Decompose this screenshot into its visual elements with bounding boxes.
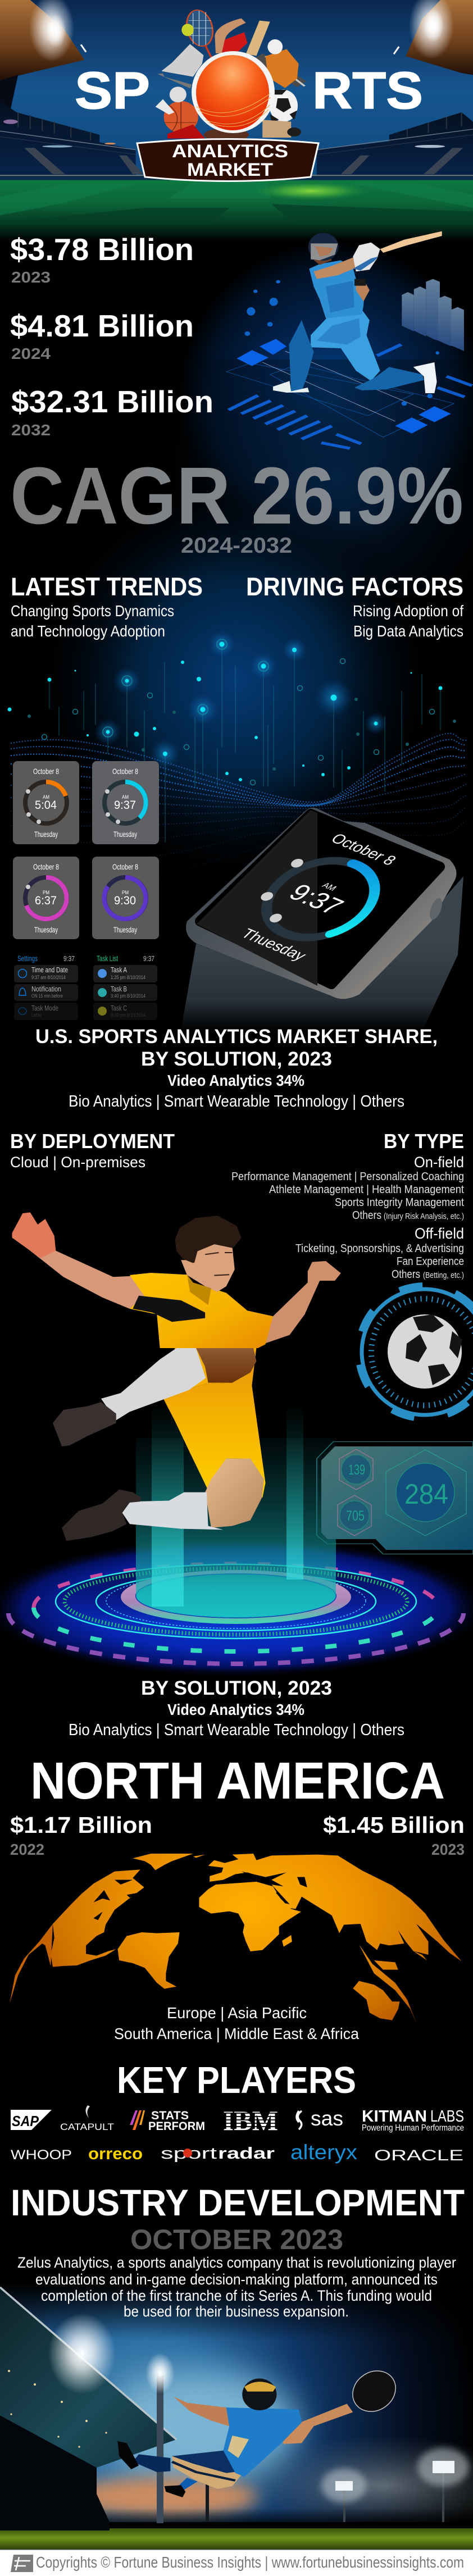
ball (345, 2363, 403, 2420)
logo: SAS: sas (311, 2107, 343, 2130)
logo: Oracle: ORACLE (374, 2147, 463, 2164)
settings list: Task Mode (31, 1004, 58, 1012)
upper body (12, 1212, 341, 1348)
text: deployment options: Cloud | On-premises (10, 1154, 145, 1171)
title word: SP: SP (75, 61, 150, 120)
legs (53, 1348, 266, 1541)
task list: Task C (111, 1004, 127, 1012)
card ring (104, 782, 146, 823)
list: off-field types: Others (392, 1268, 420, 1281)
roof floodlight (48, 2313, 116, 2394)
list: off-field types (295, 1225, 464, 1281)
settings list (14, 954, 78, 1020)
card time: AM (122, 794, 129, 800)
hud data panel (317, 1442, 473, 1554)
heading: latest trends: LATEST TRENDS (11, 572, 203, 601)
illustration: soccer player (12, 1212, 341, 1541)
text: trend description: Changing Sports Dynamics (11, 602, 174, 620)
logo: Sportradar (161, 2145, 275, 2163)
watch strap (181, 876, 463, 1031)
heading: by deployment: BY DEPLOYMENT (10, 1130, 175, 1153)
large gauge 284: 284 (404, 1478, 448, 1510)
text: other solutions: Bio Analytics | Smart Wearable Technology | Others (69, 1093, 404, 1110)
logo: Catapult: CATAPULT (60, 2122, 114, 2132)
heading: us market share: U.S. SPORTS ANALYTICS MARKET SHARE, (35, 1026, 438, 1048)
watch face: 9:37 (283, 879, 350, 920)
text: industry development paragraph: completion of the first tranche of its Series A. This funding would (41, 2287, 432, 2304)
text: trend description: and Technology Adoption (11, 622, 165, 640)
stat: 32.31 billion 2032 (11, 384, 213, 439)
settings list: Notification (31, 985, 61, 993)
watch face: October 8 (328, 831, 400, 868)
logo: SAP (11, 2110, 52, 2130)
fog (236, 2435, 473, 2536)
logo: Kitman Labs: LABS (430, 2108, 464, 2126)
title word: RTS: RTS (312, 61, 423, 120)
heading: by type: BY TYPE (384, 1130, 464, 1153)
settings list: ON 15 min before (31, 993, 63, 999)
hologram platform (0, 1537, 473, 1678)
large gauge 284 (386, 1450, 466, 1536)
stadium lights (29, 0, 454, 62)
map: orange globe (10, 1854, 462, 2023)
stadium stand (0, 2415, 110, 2531)
card day: Thuesday (34, 925, 58, 934)
task list: 9:00 pm 8/10/2014 (111, 1012, 145, 1018)
task list (93, 954, 157, 1020)
card time: AM (43, 794, 49, 800)
illustration: smart watch (181, 808, 463, 1031)
card date: October 8 (33, 767, 59, 776)
text: video analytics share: Video Analytics 34% (167, 1072, 304, 1089)
footer photo: stadium and footballer (0, 2283, 473, 2550)
banner: analytics market (137, 139, 319, 181)
card time: 5:04 (35, 799, 57, 812)
illustration: rising data lights (8, 631, 456, 843)
heading: us market share (35, 1026, 438, 1070)
watch card: cyan 9:37 (92, 761, 159, 844)
stat: 4.81 billion 2024 (10, 308, 194, 362)
card ring (104, 877, 146, 919)
text: video analytics share: Video Analytics 34% (167, 1701, 304, 1718)
task list: 3:40 pm 8/10/2014 (111, 993, 145, 999)
logo: Sportradar: radar (218, 2145, 275, 2163)
field (0, 180, 473, 240)
small gauge 705: 705 (346, 1508, 365, 1524)
watch card: orange 5:04 (13, 761, 79, 844)
platform glow (0, 1537, 473, 1678)
year 2023: 2023 (11, 268, 51, 286)
stat: 1.45 billion 2023: $1.45 Billion (323, 1812, 465, 1838)
ring markers (26, 789, 120, 889)
logo: Kitman Labs: KITMAN (362, 2108, 427, 2126)
header: stadium illustration (0, 0, 473, 240)
watch body (186, 808, 456, 999)
task list: 9:37 (143, 954, 154, 963)
card day: Thuesday (113, 830, 137, 839)
illustration: cricket batsman (273, 231, 442, 393)
card ring (25, 782, 67, 823)
list: off-field types: Off-field (415, 1225, 464, 1242)
text: other solutions: Bio Analytics | Smart Wearable Technology | Others (69, 1721, 404, 1739)
small gauge 139 (339, 1449, 373, 1490)
text: trend description (11, 602, 174, 640)
logo: Sportradar: sport (161, 2145, 217, 2163)
heading: north america: NORTH AMERICA (30, 1751, 445, 1810)
watch crown (427, 896, 444, 921)
task list: Task B (111, 985, 127, 993)
year 2024: 2024 (11, 345, 51, 362)
list: on-field types: Others (352, 1209, 381, 1222)
list: on-field types: On-field (414, 1154, 464, 1171)
sky glow (107, 2370, 298, 2483)
stat: 1.17 billion 2022: $1.17 Billion (10, 1812, 152, 1838)
map details: inland seas (93, 1872, 307, 1920)
card day: Thuesday (34, 830, 58, 839)
stat: 32.31 billion 2032: $32.31 Billion (11, 384, 213, 419)
logo: Kitman Labs (362, 2108, 464, 2133)
banner text: analytics: ANALYTICS (172, 141, 288, 161)
settings list: 9:37 am 8/10/2014 (31, 975, 66, 980)
small gauge 139: 139 (348, 1462, 365, 1478)
list: on-field types (231, 1154, 464, 1222)
card time: 9:30 (114, 894, 136, 907)
card time: PM (122, 890, 129, 895)
watch face: AM (320, 881, 338, 893)
text: other regions: South America | Middle East & Africa (114, 2025, 359, 2042)
logo: SAS (297, 2107, 343, 2130)
list: off-field types: (Betting, etc.) (423, 1271, 464, 1280)
card time: 9:37 (114, 799, 136, 812)
stat: 3.78 billion 2023 (10, 232, 194, 286)
logo: Stats Perform (130, 2109, 205, 2133)
logo: SAP: SAP (12, 2113, 39, 2129)
logo: Stats Perform: PERFORM (148, 2120, 205, 2133)
settings list: Letter (31, 1012, 42, 1018)
watch face: Thuesday (238, 926, 311, 963)
hologram light beams (136, 1404, 336, 1618)
stat: 1.17 billion 2022 (10, 1812, 152, 1858)
date: october 2023: OCTOBER 2023 (130, 2224, 343, 2255)
footballer (117, 2378, 353, 2497)
card time: 6:37 (35, 894, 57, 907)
stat: 1.45 billion 2023 (323, 1812, 465, 1858)
technology glow backgrounds (0, 240, 473, 888)
watch card: magenta 6:37 (13, 857, 79, 939)
stadium structures (0, 0, 473, 225)
task list: Task List (97, 954, 118, 963)
icon: sports equipment cluster (156, 9, 304, 142)
text: industry development paragraph: evaluations and in-game decision-making platform, announced its (35, 2271, 438, 2288)
logo: Whoop: WHOOP (11, 2147, 72, 2163)
year 2023: 2023 (431, 1841, 465, 1858)
card day: Thuesday (113, 925, 137, 934)
pitch grass (0, 2528, 473, 2550)
card date: October 8 (33, 862, 59, 871)
illustration: dotted data wave (11, 734, 466, 879)
heading: driving factors: DRIVING FACTORS (246, 572, 463, 601)
logo: Fortune Business Insights (11, 2555, 33, 2572)
card date: October 8 (112, 767, 138, 776)
year 2022: 2022 (10, 1841, 44, 1858)
card time: PM (43, 890, 49, 895)
settings list: Time and Date (31, 966, 68, 974)
outer segment rings (8, 1613, 463, 1664)
heading: key players: KEY PLAYERS (117, 2059, 356, 2101)
text: industry development paragraph (17, 2254, 456, 2320)
text: other regions: Europe | Asia Pacific (167, 2004, 307, 2022)
logo: Alteryx: alteryx (290, 2141, 358, 2164)
illustration: tech floor and bars (226, 279, 472, 448)
watch face (221, 826, 417, 968)
card date: October 8 (112, 862, 138, 871)
sky (0, 0, 473, 180)
logo: IBM: IBM (223, 2105, 278, 2136)
text: factor description (353, 602, 463, 640)
stat: 4.81 billion 2024: $4.81 Billion (10, 308, 194, 343)
heading: us market share: BY SOLUTION, 2023 (141, 1048, 332, 1070)
settings list: Settings (17, 954, 38, 963)
logo: Orreco: orreco (88, 2145, 143, 2163)
icon: soccer ball gauge (358, 1286, 473, 1418)
sunset (67, 2477, 258, 2517)
logo: Stats Perform: STATS (151, 2109, 189, 2122)
footer bar (0, 2549, 473, 2576)
stat: 3.78 billion 2023: $3.78 Billion (10, 232, 194, 267)
sky (0, 2283, 473, 2531)
watch card: purple 9:30 (92, 857, 159, 939)
platform rings (56, 1564, 416, 1639)
banner text: market: MARKET (187, 160, 274, 180)
logo: Catapult (60, 2105, 114, 2132)
text: other regions (114, 2004, 359, 2042)
heading: by solution: BY SOLUTION, 2023 (141, 1677, 332, 1699)
task list: 1:25 pm 8/10/2014 (111, 975, 145, 980)
card ring (25, 877, 67, 919)
light towers (145, 2353, 469, 2523)
year 2032: 2032 (11, 421, 51, 439)
text: industry development paragraph: be used for their business expansion. (124, 2303, 349, 2320)
small gauge 705 (338, 1495, 371, 1536)
watch screen (200, 814, 440, 984)
settings list: 9:37 (63, 954, 75, 963)
roof lamps (8, 2370, 107, 2448)
stadium roof (0, 2287, 176, 2468)
task list: Task A (111, 966, 127, 974)
cagr period: 2024-2032 (181, 534, 292, 558)
icon: cricket ball (192, 51, 275, 133)
